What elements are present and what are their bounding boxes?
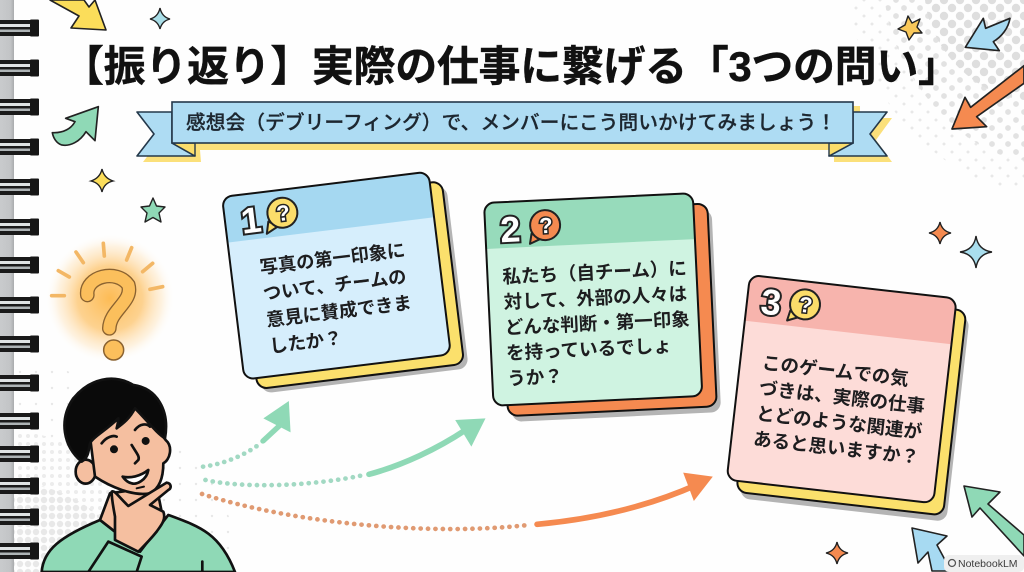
card 2 question text: どんな判断・第一印象	[504, 308, 690, 338]
card 1	[222, 172, 469, 394]
decorative sparkle: blue right	[960, 236, 992, 268]
card 3	[727, 275, 970, 522]
decorative arrow: blue bottom right	[912, 528, 951, 571]
decorative star: yellow	[898, 16, 922, 40]
neck	[100, 487, 163, 552]
mouth	[123, 470, 148, 484]
card 2	[484, 193, 721, 422]
decorative sparkle: light blue	[150, 8, 170, 29]
banner ribbon	[137, 102, 892, 162]
decorative arrow: orange top right	[952, 66, 1024, 129]
curved arrow to card 2	[205, 418, 485, 485]
decorative sparkle: orange right	[929, 222, 951, 244]
decorative arrow: green curved	[52, 107, 98, 145]
decorative arrow: blue top right	[965, 18, 1010, 51]
card 3 question text: あると思いますか？	[752, 428, 920, 468]
card 2 question text: 対して、外部の人々は	[503, 283, 688, 313]
card 2 face	[484, 193, 702, 406]
hand	[112, 483, 171, 552]
hair	[65, 379, 166, 462]
thinking person	[42, 379, 235, 572]
card 1 shadow and back sheet	[235, 181, 469, 394]
question bubble icon	[263, 196, 300, 234]
spiral binding	[0, 0, 39, 572]
decorative arrow: yellow top left	[50, 0, 106, 30]
question bubble icon: ?	[275, 200, 291, 226]
card 3 question text: づきは、実際の仕事	[758, 377, 926, 417]
card 3 question text: とどのような関連が	[755, 403, 924, 442]
card 1 face	[222, 172, 451, 380]
decorative arrow: green bottom right	[964, 486, 1024, 556]
decorative star: green	[141, 198, 165, 222]
question mark glow icon	[45, 233, 175, 363]
card 3 shadow and back sheet	[736, 287, 970, 522]
number 3: 3	[759, 281, 783, 324]
question bubble icon: ?	[539, 213, 553, 238]
eyes and brows	[102, 424, 150, 488]
NotebookLM badge: NotebookLM	[958, 558, 1018, 570]
face	[90, 407, 170, 494]
card 2 question text: を持っているでしょ	[506, 335, 672, 364]
card 1 question text: 意見に賛成できま	[265, 292, 413, 330]
question bubble icon	[787, 288, 822, 324]
halftone background: top right	[850, 0, 1024, 190]
ear	[76, 460, 96, 484]
title: 【振り返り】実際の仕事に繋げる「3つの問い」	[62, 43, 960, 90]
halftone background: bottom left	[0, 360, 240, 572]
sleeve	[88, 542, 142, 572]
question bubble icon	[528, 209, 561, 244]
card 2 shadow and back sheet	[499, 203, 721, 422]
card 3 face	[727, 275, 957, 503]
decorative sparkle: orange bottom	[826, 542, 848, 564]
number 1: 1	[239, 199, 263, 242]
NotebookLM badge	[944, 555, 1024, 572]
number 2: 2	[499, 208, 521, 250]
card 2 question text: 私たち（自チーム）に	[502, 258, 687, 287]
card 1 question text: 写真の第一印象に	[259, 239, 406, 278]
curved arrow to card 1	[203, 401, 291, 467]
card 1 question text: ついて、チームの	[262, 266, 408, 304]
shirt	[42, 515, 235, 572]
card 2 question text: うか？	[507, 365, 563, 389]
question bubble icon: ?	[798, 292, 814, 318]
banner text: 感想会（デブリーフィング）で、メンバーにこう問いかけてみましょう！	[186, 111, 836, 134]
card 1 question text: したか？	[268, 327, 343, 357]
card 3 question text: このゲームでの気	[761, 352, 910, 390]
decorative sparkle: yellow	[91, 169, 113, 192]
curved arrow to card 3	[202, 473, 713, 529]
